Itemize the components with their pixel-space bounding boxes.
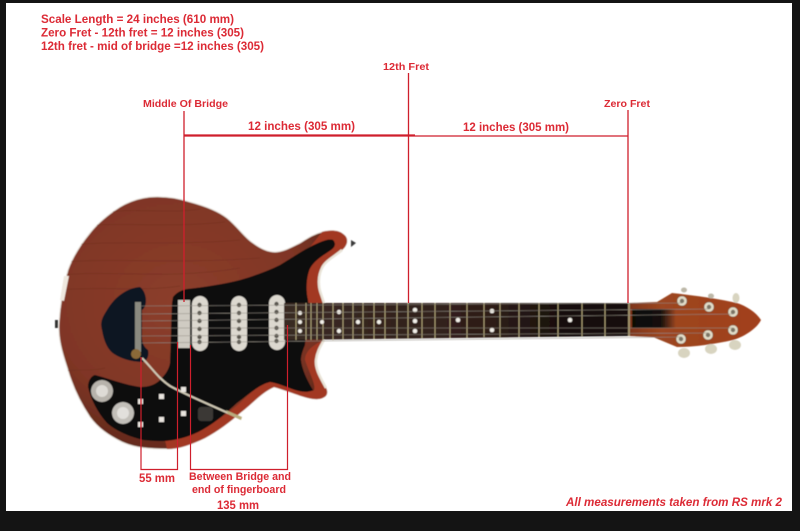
headstock [628, 288, 761, 358]
tremolo arm [131, 349, 242, 420]
bridge bar [135, 302, 141, 352]
label: zero fret: Zero Fret [604, 98, 650, 110]
scale summary text: 12th fret - mid of bridge =12 inches (305) [41, 39, 264, 53]
strap button [351, 240, 356, 247]
tuning pegs [678, 288, 741, 358]
horizontal dimension, bridge to 12th fret [184, 134, 415, 137]
middle of bridge line [183, 111, 185, 302]
frets [296, 303, 629, 340]
label: middle of bridge: Middle Of Bridge [143, 98, 228, 110]
guitar body [59, 197, 347, 449]
label: 12 inches left: 12 inches (305 mm) [248, 121, 355, 133]
pickguard [88, 240, 335, 441]
cream cutaway edges [316, 250, 342, 388]
tailpiece cover [101, 287, 148, 362]
55 mm bracket [141, 342, 178, 470]
selector switches [138, 387, 186, 427]
upper horn binding tint [306, 231, 347, 303]
fret position dots [298, 308, 572, 333]
guitar illustration [55, 197, 761, 449]
tuner posts [676, 296, 738, 344]
measurement lines [141, 73, 628, 470]
label: 12 inches right: 12 inches (305 mm) [463, 122, 569, 134]
horizontal dimension, 12th fret to zero fret [415, 135, 628, 137]
lower red binding tint [165, 340, 327, 449]
strings [141, 303, 733, 343]
footnote: All measurements taken from RS mrk 2 [565, 497, 783, 509]
zero fret line [627, 110, 629, 303]
scale summary text: Zero Fret - 12th fret = 12 inches (305) [41, 26, 244, 40]
fingerboard [284, 303, 630, 340]
pickups [192, 295, 285, 351]
wooden edge wear [60, 276, 69, 301]
wood grain [66, 210, 134, 372]
scale summary text: Scale Length = 24 inches (610 mm) [41, 12, 234, 26]
scale summary text [41, 12, 264, 53]
135 mm bracket [190, 325, 288, 470]
label: between bridge and end of fingerboard: Between Bridge and [189, 471, 291, 483]
12th fret line [408, 73, 410, 303]
control knobs [91, 380, 134, 424]
label: 135 mm: 135 mm [217, 500, 259, 512]
jack plate [198, 407, 213, 421]
label: 55 mm: 55 mm [139, 473, 175, 485]
label: between bridge and end of fingerboard [189, 471, 291, 496]
bridge saddle [178, 300, 190, 348]
label: 12th fret: 12th Fret [383, 61, 430, 73]
label: between bridge and end of fingerboard: end of fingerboard [192, 484, 286, 496]
